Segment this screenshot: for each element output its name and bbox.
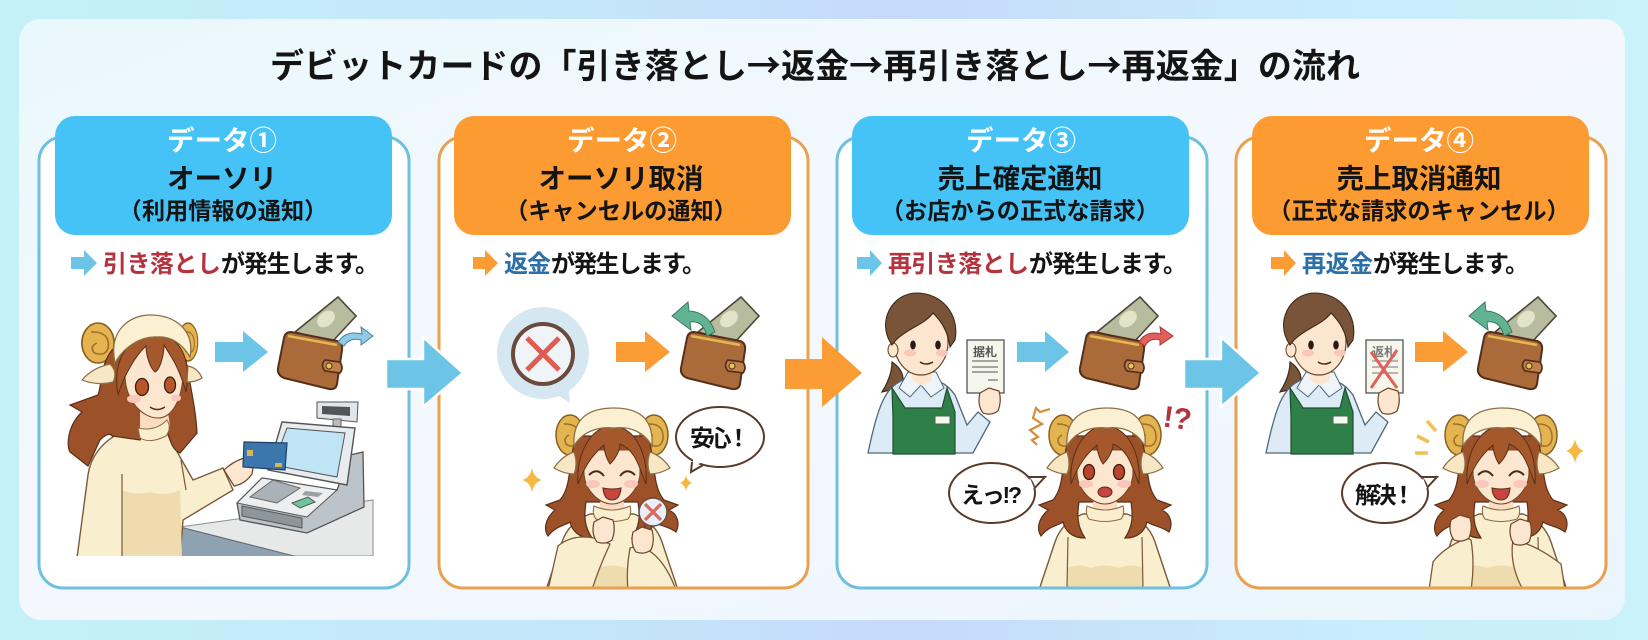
header: data 1: オーソリ bbox=[167, 163, 277, 194]
surprise marks bbox=[1030, 401, 1194, 445]
girl: relieved bbox=[546, 408, 678, 590]
speech bubble bbox=[949, 463, 1045, 523]
speech bubble bbox=[676, 407, 764, 472]
panel: data 4 bbox=[1236, 116, 1606, 590]
arrow bbox=[1415, 331, 1468, 372]
girl: surprised bbox=[1039, 408, 1171, 590]
title: デビットカードの「引き落とし→返金→再引き落とし→再返金」の流れ bbox=[270, 39, 1360, 88]
header: data 3: データ③ bbox=[966, 125, 1076, 156]
wallet with returning money bbox=[1469, 297, 1556, 389]
header: data 1: データ① bbox=[167, 125, 277, 156]
bill: 据札 bbox=[973, 344, 997, 359]
result line: data 4 bbox=[1271, 250, 1529, 278]
header: data 4: （正式な請求のキャンセル） bbox=[1268, 198, 1570, 224]
result line: data 2: が発生します。 bbox=[551, 250, 706, 278]
result line: data 1: 引き落とし bbox=[103, 251, 221, 278]
panel: data 3 bbox=[837, 116, 1207, 590]
hand-held cancel sign bbox=[638, 497, 668, 528]
result line: data 1: が発生します。 bbox=[221, 250, 379, 278]
arrow bbox=[215, 331, 268, 372]
wallet with outgoing money bbox=[278, 297, 373, 389]
flow arrow 2 bbox=[785, 337, 862, 407]
result line: data 3: が発生します。 bbox=[1029, 250, 1187, 278]
speech bubble: 解決！ bbox=[1355, 482, 1415, 508]
arrow bbox=[616, 331, 670, 372]
panel: data 1 bbox=[39, 116, 409, 588]
panel: data 2 bbox=[439, 116, 808, 590]
flow arrow 1 bbox=[386, 337, 463, 407]
wallet with outgoing money bbox=[1080, 297, 1173, 389]
joy marks bbox=[1415, 421, 1584, 463]
header: data 1 bbox=[55, 116, 392, 235]
bill bbox=[967, 340, 1004, 393]
header: data 1: （利用情報の通知） bbox=[119, 198, 327, 224]
result line: data 2 bbox=[473, 250, 706, 278]
girl: resolved bbox=[1429, 408, 1567, 590]
result line: data 1 bbox=[71, 250, 379, 278]
result line: data 2: 返金 bbox=[504, 251, 551, 278]
result line: data 4: が発生します。 bbox=[1373, 250, 1529, 278]
header: data 3 bbox=[852, 116, 1189, 235]
result line: data 4: 再返金 bbox=[1302, 251, 1373, 278]
clerk with bill bbox=[868, 293, 1004, 454]
illustration: girl paying at register bbox=[68, 315, 373, 558]
clerk with cancelled bill bbox=[1266, 293, 1403, 454]
speech bubble: 安心！ bbox=[690, 425, 750, 451]
surprise marks: !? bbox=[1161, 401, 1194, 437]
header: data 4: 売上取消通知 bbox=[1336, 163, 1502, 194]
header: data 2 bbox=[454, 116, 791, 235]
speech bubble bbox=[1342, 463, 1437, 523]
header: data 3: 売上確定通知 bbox=[938, 163, 1102, 194]
cancel icon bubble bbox=[497, 307, 589, 403]
header: data 2: データ② bbox=[567, 125, 677, 156]
result line: data 3 bbox=[857, 250, 1187, 278]
sparkles bbox=[522, 468, 692, 492]
register counter bbox=[180, 500, 373, 556]
arrow bbox=[1017, 331, 1069, 372]
wallet with returning money bbox=[672, 297, 759, 389]
header: data 3: （お店からの正式な請求） bbox=[881, 198, 1159, 224]
cancelled bill: 返札 bbox=[1372, 344, 1396, 359]
header: data 2: オーソリ取消 bbox=[538, 163, 704, 194]
girl bbox=[68, 315, 233, 558]
cancelled bill bbox=[1366, 340, 1403, 393]
header: data 4: データ④ bbox=[1364, 125, 1474, 156]
register bbox=[237, 402, 364, 533]
flow arrow 3 bbox=[1184, 337, 1261, 407]
header: data 4 bbox=[1252, 116, 1589, 235]
result line: data 3: 再引き落とし bbox=[888, 251, 1029, 278]
header: data 2: （キャンセルの通知） bbox=[505, 198, 737, 224]
speech bubble: えっ!? bbox=[961, 482, 1022, 508]
credit card bbox=[243, 442, 287, 470]
